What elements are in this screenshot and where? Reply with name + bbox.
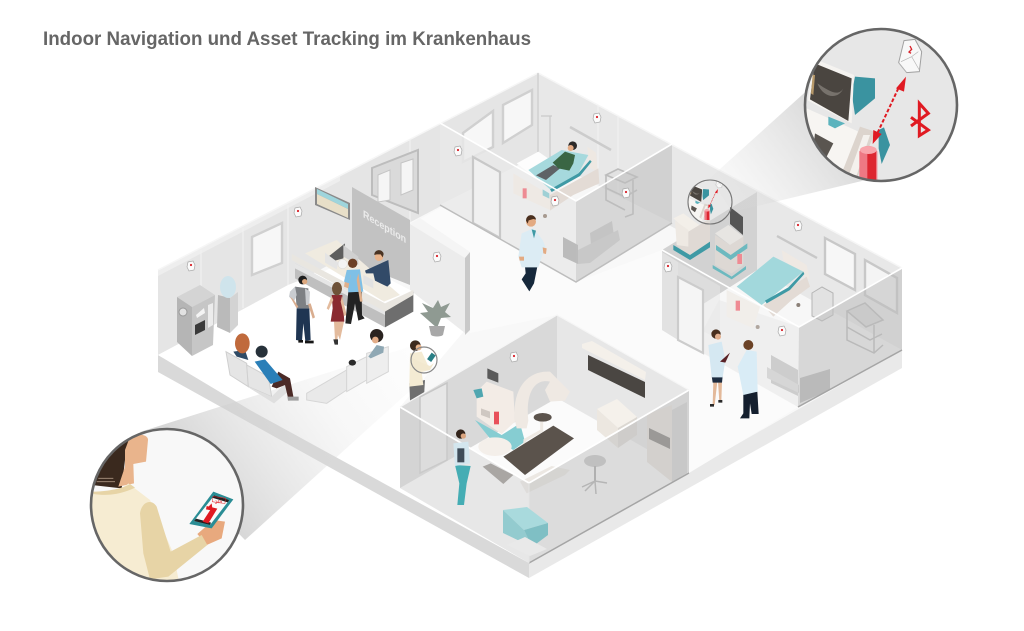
seated woman <box>233 333 250 360</box>
glass walls <box>400 407 529 563</box>
glass walls <box>576 144 672 282</box>
title: Indoor Navigation und Asset Tracking im Krankenhaus <box>43 29 531 50</box>
back double door <box>372 150 418 213</box>
icon: torso <box>92 484 178 580</box>
patient bed <box>513 141 599 218</box>
icon: machine, tag, beacon and signal arrow <box>806 38 922 180</box>
wall below glass <box>703 300 799 407</box>
stool <box>582 455 607 494</box>
info screen <box>315 187 350 220</box>
glass wall <box>798 268 902 407</box>
reception sign: Reception <box>363 209 406 246</box>
seated man <box>255 346 299 401</box>
window right <box>503 90 532 143</box>
icon: hand <box>197 520 225 545</box>
wall beacons <box>187 113 802 362</box>
vending machine <box>177 285 215 356</box>
wall rail <box>777 236 817 258</box>
man in grey vest <box>289 276 315 343</box>
icon: phone <box>189 492 233 528</box>
corner wall <box>410 218 470 335</box>
doctors in corridor <box>708 329 759 418</box>
patient room <box>440 90 672 282</box>
small circle: asset marker <box>687 180 743 235</box>
icon: hair <box>95 441 128 488</box>
lightbox <box>582 341 646 398</box>
patient <box>536 141 577 180</box>
trolley <box>606 169 637 217</box>
floor slab <box>158 155 902 578</box>
right room <box>662 192 902 407</box>
icon: phone: J45 <box>214 499 223 505</box>
lobby floor <box>158 260 529 563</box>
reception panel <box>352 187 410 285</box>
armchair <box>767 355 830 403</box>
male doctor <box>738 340 759 418</box>
doctor centre <box>518 215 547 291</box>
door <box>678 277 703 353</box>
callout: asset tracking <box>804 28 958 182</box>
armchair <box>563 221 620 264</box>
woman in red dress <box>327 282 347 345</box>
nurse <box>453 429 471 505</box>
lobby furnishing <box>177 187 470 356</box>
incubator box <box>503 507 548 556</box>
callout: phone navigation <box>87 429 243 587</box>
wall rail <box>570 127 611 150</box>
icon: arm <box>140 502 207 579</box>
waiting area <box>226 329 430 415</box>
machinery <box>673 213 810 329</box>
seats left <box>226 352 290 403</box>
c-arm machine and table <box>473 368 574 493</box>
water dispenser <box>217 276 238 333</box>
reception desk <box>292 240 413 327</box>
beam: phone callout <box>140 346 434 540</box>
outer back walls <box>158 73 902 355</box>
woman with phone <box>409 340 430 415</box>
icon: face and neck <box>118 435 148 487</box>
icon: bluetooth <box>911 103 928 136</box>
iv stand <box>541 116 552 160</box>
window left <box>825 238 855 290</box>
equipment cart <box>713 225 747 279</box>
beam: asset callout <box>710 86 866 212</box>
sink <box>597 399 637 448</box>
corridor floor <box>413 207 798 473</box>
small circle: phone marker <box>411 347 437 373</box>
wall with door <box>440 123 576 282</box>
seated man right <box>349 329 384 366</box>
side cabinet <box>812 287 833 321</box>
man in blue shirt <box>344 259 365 324</box>
seats right <box>307 347 388 403</box>
lobby people <box>289 250 391 345</box>
building floor plan <box>140 73 902 578</box>
receptionist <box>365 250 391 287</box>
plant <box>420 300 451 336</box>
window: lobby <box>252 223 282 275</box>
window right <box>865 260 897 313</box>
door <box>420 383 447 473</box>
window left <box>463 111 493 162</box>
female doctor <box>708 329 730 407</box>
operating room <box>400 315 689 563</box>
door <box>473 157 500 238</box>
trolley <box>847 303 883 353</box>
ultrasound machine <box>673 213 710 260</box>
cabinet <box>647 402 687 482</box>
hospital bed <box>727 250 810 329</box>
